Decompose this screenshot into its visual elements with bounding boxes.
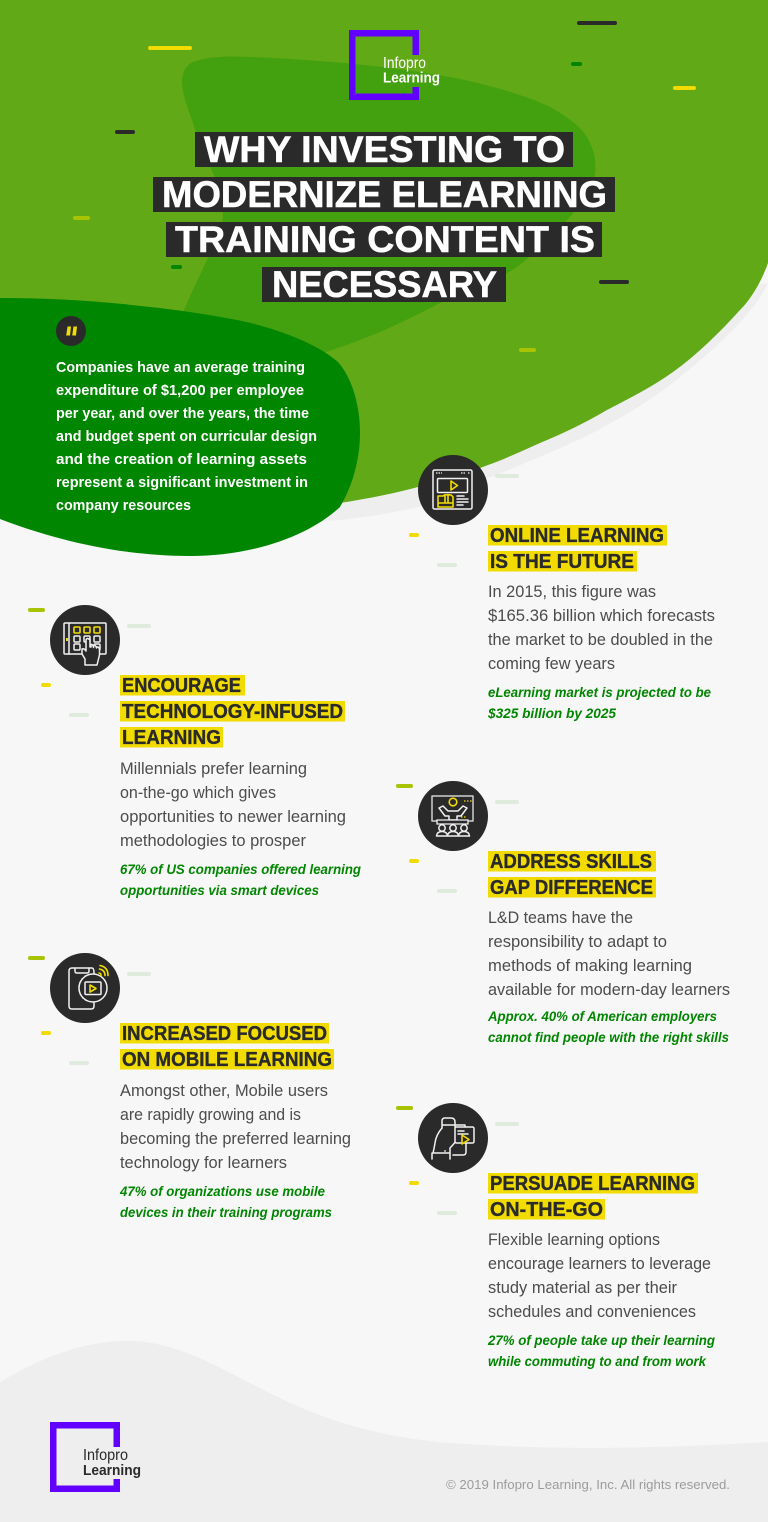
statistic: $325 billion by 2025 [487,705,616,721]
background: main green header shape [0,0,768,520]
dashes [409,474,519,567]
panel: learning on-the-go [396,1103,715,1369]
statistic [119,1183,332,1220]
title: MODERNIZE ELEARNING [162,174,607,215]
body text: Amongst other, Mobile users [120,1081,328,1100]
statistic: 67% of US companies offered learning [120,861,361,877]
copyright: © 2019 Infopro Learning, Inc. All rights reserved. [446,1477,730,1492]
icon: video browser window [418,455,488,525]
body text: becoming the preferred learning [120,1129,351,1148]
intro text: company resources [56,497,191,514]
heading: ON MOBILE LEARNING [122,1049,332,1071]
background: grey shadow wave [0,283,768,530]
body text: coming few years [488,654,615,673]
heading: INCREASED FOCUSED [122,1023,327,1045]
statistic: Approx. 40% of American employers [487,1008,717,1024]
logo: footer [50,1422,141,1492]
intro text: and budget spent on curricular design [56,428,317,445]
intro text: per year, and over the years, the time [56,405,309,422]
statistic [487,684,711,721]
heading [488,851,656,899]
body text: Flexible learning options [488,1230,660,1249]
statistic [487,1332,715,1369]
panel: online learning [409,455,715,721]
statistic [120,861,361,898]
body text: encourage learners to leverage [488,1254,711,1273]
heading [120,675,345,749]
body text: opportunities to newer learning [120,807,346,826]
body text: on-the-go which gives [120,783,276,802]
statistic: 47% of organizations use mobile [119,1183,325,1199]
statistic: while commuting to and from work [488,1353,707,1369]
heading: IS THE FUTURE [490,551,634,573]
panel: technology-infused learning [28,605,361,898]
heading [488,1173,698,1221]
decorative dashes: header [73,21,696,352]
statistic: 27% of people take up their learning [487,1332,715,1348]
body text [120,759,346,850]
intro text: Companies have an average training [56,359,305,376]
title: WHY INVESTING TO [204,129,565,170]
icon: phone with video [50,953,120,1023]
heading: PERSUADE LEARNING [490,1173,695,1195]
logo: top: Infopro [383,55,426,72]
body text: L&D teams have the [488,908,633,927]
body text: methodologies to prosper [120,831,306,850]
intro text: represent a significant investment in [56,474,308,491]
heading: LEARNING [122,727,221,749]
logo: footer: Infopro [83,1447,128,1464]
statistic: devices in their training programs [120,1204,332,1220]
body text: the market to be doubled in the [488,630,713,649]
intro text: expenditure of $1,200 per employee [56,382,304,399]
dashes [28,956,151,1065]
heading: ONLINE LEARNING [490,525,664,547]
heading: ENCOURAGE [122,675,241,697]
heading [488,525,667,573]
body text: methods of making learning [488,956,692,975]
body text: schedules and conveniences [488,1302,696,1321]
heading: TECHNOLOGY-INFUSED [122,701,343,723]
dashes [396,1106,519,1215]
body text [488,1230,711,1321]
statistic: cannot find people with the right skills [488,1029,729,1045]
body text: available for modern-day learners [488,980,730,999]
dashes [396,784,519,893]
panel: mobile learning [28,953,351,1220]
icon: quote mark [56,316,86,346]
heading: ON-THE-GO [490,1199,603,1221]
body text: are rapidly growing and is [120,1105,301,1124]
title: TRAINING CONTENT IS [175,219,595,260]
logo: top: Learning [383,70,440,86]
body text [120,1081,351,1172]
statistic [487,1008,729,1045]
body text: Millennials prefer learning [120,759,307,778]
intro text: and the creation of learning assets [56,451,307,468]
panel: skills gap [396,781,730,1045]
panel: intro quote blob [0,298,360,556]
body text: responsibility to adapt to [488,932,667,951]
body text: study material as per their [488,1278,677,1297]
title: NECESSARY [272,264,497,305]
logo: top [349,30,440,100]
body text: In 2015, this figure was [488,582,656,601]
heading [120,1023,334,1071]
body text: technology for learners [120,1153,287,1172]
body text [488,582,715,673]
statistic: eLearning market is projected to be [488,684,711,700]
intro text [56,359,317,514]
icon: keypad with hand [50,605,120,675]
body text [488,908,730,999]
heading: GAP DIFFERENCE [490,877,653,899]
background: darker inner green blob [170,57,595,360]
body text: $165.36 billion which forecasts [488,606,715,625]
title [153,129,615,305]
blob shape [0,298,360,556]
icon: presenter and audience [418,781,488,851]
icon: hand holding phone with chat [418,1103,488,1173]
heading: ADDRESS SKILLS [490,851,652,873]
dashes [28,608,151,717]
background: bottom grey wave [0,1341,768,1522]
logo: footer: Learning [83,1462,141,1479]
statistic: opportunities via smart devices [120,882,319,898]
